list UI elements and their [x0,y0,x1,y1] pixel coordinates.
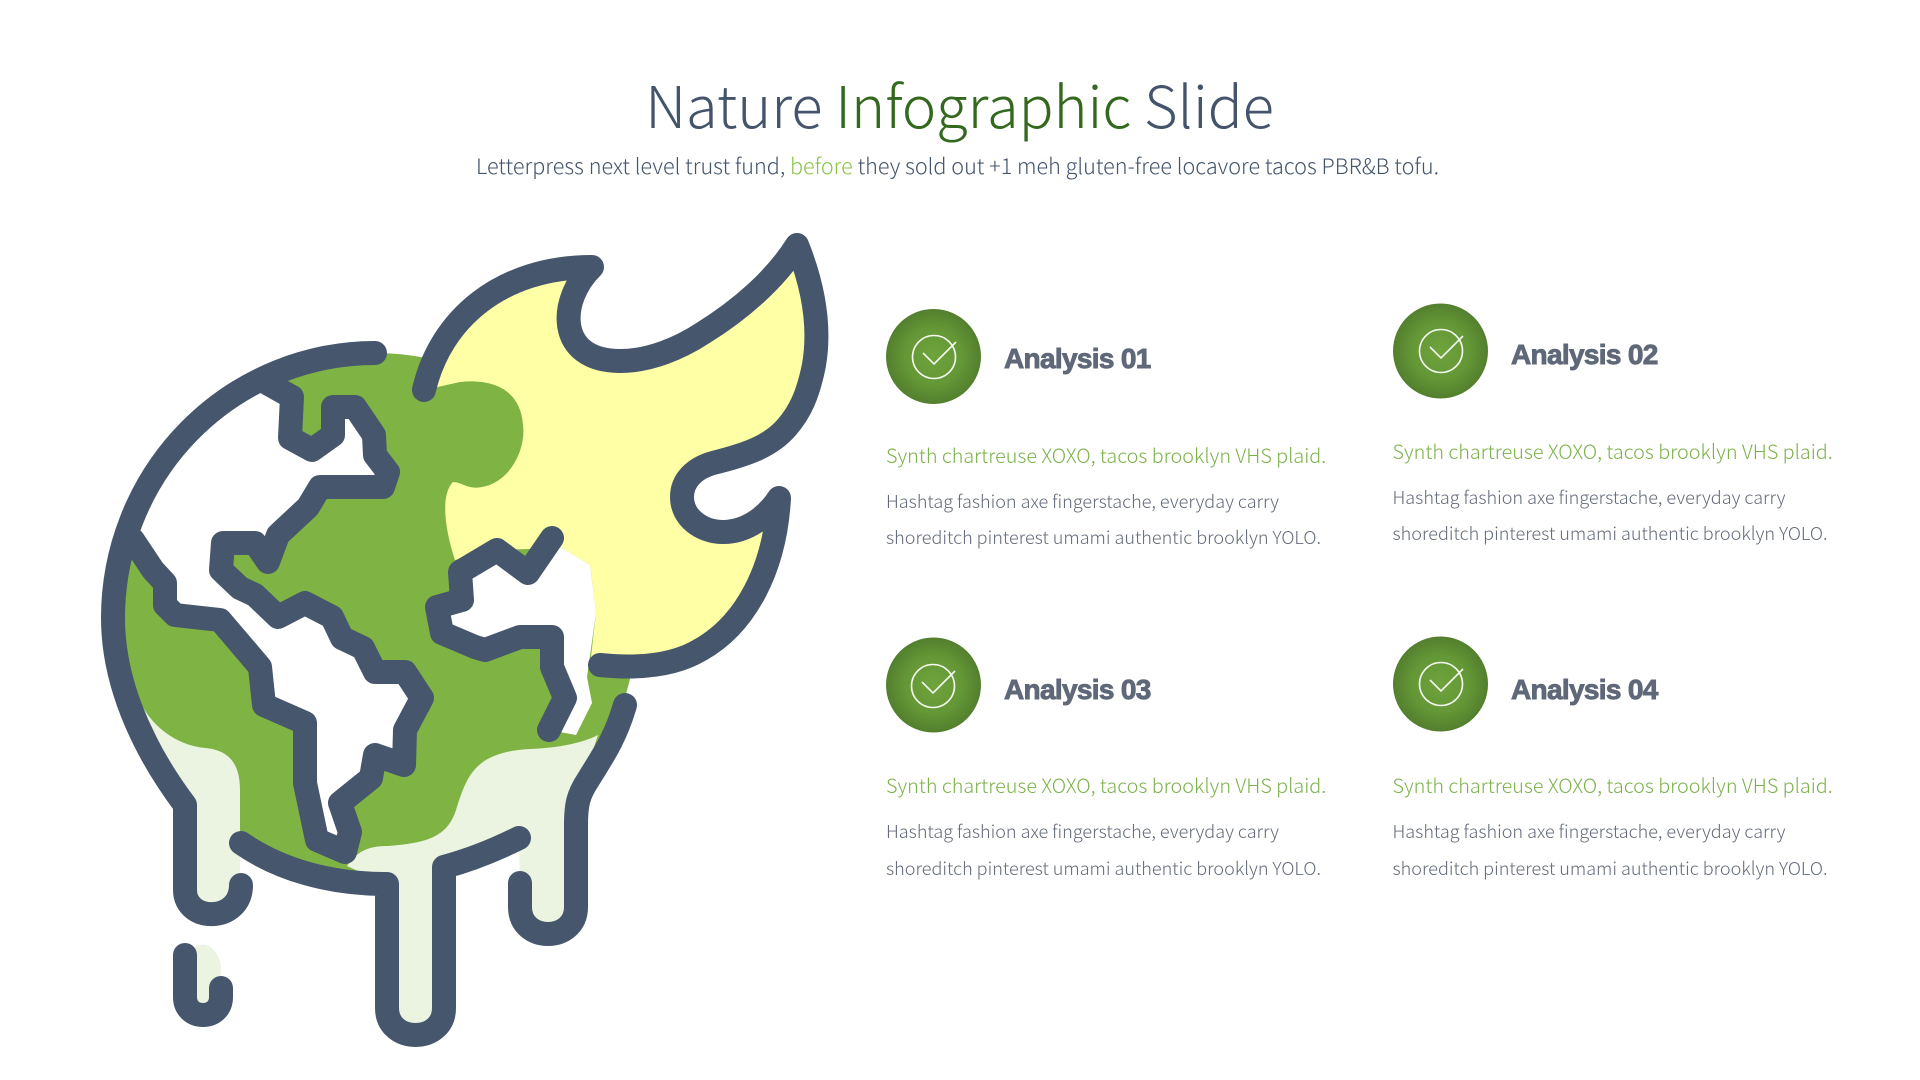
heading 02: Analysis 02 [1511,339,1658,370]
icon: check badge 02 [1393,304,1488,398]
body text 01: shoreditch pinterest umami authentic brooklyn YOLO. [886,524,1321,550]
item: Analysis 01 [886,309,1326,550]
body text 03: shoreditch pinterest umami authentic brooklyn YOLO. [886,855,1321,881]
melt: right and centre pale drips [347,735,598,1035]
icon: check badge 03 [886,638,981,732]
item: Analysis 02 [1392,304,1833,546]
icon: check badge 01 [886,309,981,404]
right edge and right drip [520,705,625,934]
green line 03: Synth chartreuse XOXO, tacos brooklyn VHS plaid. [886,770,1326,799]
melt: small falling drop fill [190,945,221,1010]
body text 03: Hashtag fashion axe fingerstache, everyday carry [886,818,1279,844]
melt: left pale drip [138,698,241,915]
body text 02: shoreditch pinterest umami authentic brooklyn YOLO. [1392,520,1828,546]
flame fill [424,245,816,666]
globe bottom arc and centre drip [241,838,519,1035]
continent outline: Africa and Asia [437,538,565,730]
green line 02: Synth chartreuse XOXO, tacos brooklyn VHS plaid. [1392,436,1833,465]
item: Analysis 03 [886,638,1326,881]
heading 03: Analysis 03 [1004,674,1151,705]
body text 04: shoreditch pinterest umami authentic brooklyn YOLO. [1392,855,1828,881]
continent outline: Americas [133,383,422,852]
body text 01: Hashtag fashion axe fingerstache, everyday carry [886,488,1279,514]
subtitle: Letterpress next level trust fund, before they sold out +1 meh gluten-free locavore tacos PBR&B tofu. [476,150,1439,181]
globe green fill [113,353,637,883]
body text 02: Hashtag fashion axe fingerstache, everyday carry [1392,484,1786,510]
green line 04: Synth chartreuse XOXO, tacos brooklyn VHS plaid. [1392,770,1833,799]
continent: Americas white land [124,377,422,852]
continent: Africa and Asia white land [437,538,596,735]
body text 04: Hashtag fashion axe fingerstache, everyday carry [1392,818,1786,844]
small falling drop [185,955,221,1015]
green line 01: Synth chartreuse XOXO, tacos brooklyn VHS plaid. [886,440,1326,469]
title: Nature Infographic Slide [645,61,1274,145]
illustration: melting globe on fire [113,245,816,1035]
globe outline and left drip [113,353,375,914]
item: Analysis 04 [1392,636,1833,881]
flame outline [424,245,816,666]
icon: check badge 04 [1393,636,1488,732]
heading 04: Analysis 04 [1511,674,1659,705]
heading 01: Analysis 01 [1004,343,1151,374]
